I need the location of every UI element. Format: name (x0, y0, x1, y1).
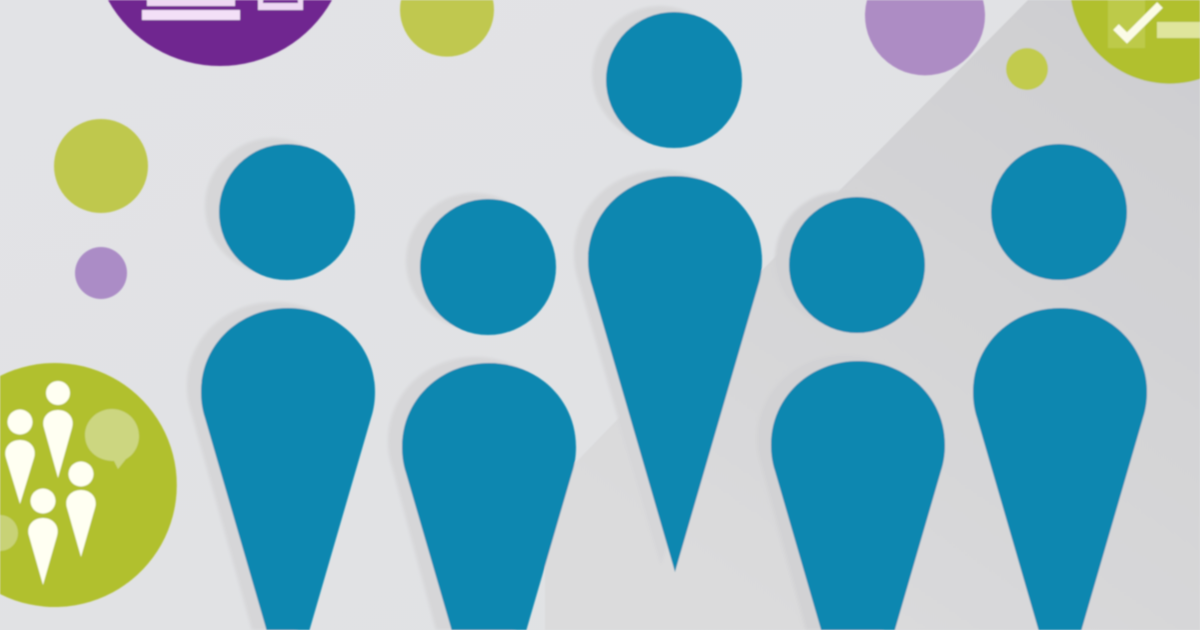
icon circle: green people (0, 363, 177, 607)
decorative circle: lilac top (865, 0, 985, 75)
decorative circle: small purple left (75, 247, 127, 299)
icon: white person 3 (66, 462, 96, 557)
icon: speech bubble large (85, 409, 139, 469)
icon circle: purple laptop (108, 0, 332, 66)
icon: white person 4 (28, 488, 58, 585)
icon: speech bubble small (0, 515, 18, 551)
icon circle: green checklist (1071, 0, 1200, 84)
decorative circle: small lime (1006, 48, 1048, 90)
person figure 1 (187, 138, 375, 630)
person figure 2 (388, 193, 576, 630)
person figure 4 (757, 191, 945, 630)
person figure 3 (574, 6, 762, 572)
decorative circle: lime left (54, 119, 148, 213)
diagonal grey panel (545, 0, 1200, 630)
icon: white person 1 (43, 381, 73, 478)
icon: white person 2 (5, 410, 35, 504)
decorative circle: lime top (400, 0, 494, 57)
person figure 5 (973, 144, 1147, 630)
